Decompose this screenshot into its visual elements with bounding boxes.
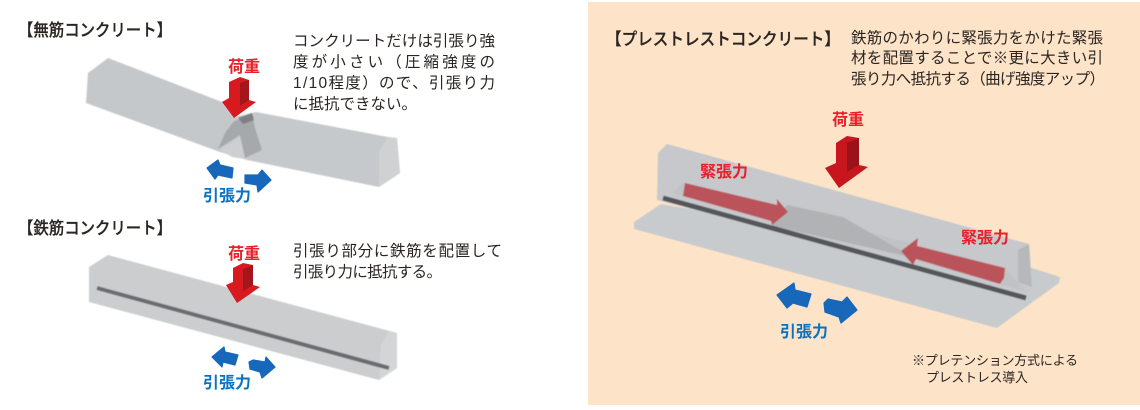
channel shadow: [673, 183, 1025, 291]
label: tension: 引張力: [203, 374, 251, 392]
text block: plain concrete explanation: に抵抗できない。: [293, 95, 417, 113]
arrow: tension right: [249, 357, 275, 378]
note: pretension method: [912, 353, 1078, 385]
arrow: tension right: [245, 170, 271, 192]
label: prestress left: 緊張力: [700, 163, 748, 181]
arrow: tension left: [212, 347, 238, 367]
text block: prestressed explanation: 張り力へ抵抗する（曲げ強度アップ）: [851, 70, 1105, 88]
text block: plain concrete explanation: 度が小さい（圧縮強度の: [293, 53, 495, 71]
panel: prestressed background: [588, 2, 1140, 405]
arrow: load: [226, 263, 260, 303]
arrow: prestress right: [901, 238, 1005, 284]
text block: prestressed explanation: 材を配置することで※更に大きい引: [851, 49, 1103, 67]
note: pretension method: ※プレテンション方式による: [912, 353, 1078, 368]
arrow: load: [222, 77, 256, 118]
heading: reinforced concrete: 【鉄筋コンクリート】: [18, 219, 172, 238]
flange: [634, 204, 1060, 328]
label: tension: 引張力: [780, 323, 828, 341]
center dark region: [772, 205, 916, 258]
heading: plain concrete: 【無筋コンクリート】: [18, 21, 172, 40]
heading: prestressed concrete: 【プレストレストコンクリート】: [606, 30, 840, 49]
text block: prestressed explanation: 鉄筋のかわりに緊張力をかけた緊張: [851, 29, 1103, 47]
text block: plain concrete explanation: コンクリートだけは引張り強: [293, 32, 495, 50]
arrow: tension right: [824, 297, 857, 323]
text block: plain concrete explanation: 1/10程度）ので、引張り力: [293, 74, 495, 92]
diagram: prestressed T beam: [634, 144, 1060, 328]
arrow: tension left: [207, 160, 233, 179]
arrow: load: [825, 136, 868, 188]
arrow: tension left: [777, 283, 811, 308]
label: load: 荷重: [832, 111, 864, 129]
label: prestress right: 緊張力: [961, 229, 1009, 247]
web: [657, 144, 1032, 296]
rebar: [97, 288, 389, 368]
section: plain concrete: [18, 21, 495, 205]
rebar: [663, 198, 1026, 298]
text block: plain concrete explanation: [293, 32, 495, 113]
text block: reinforced concrete explanation: 引張り力に抵抗する。: [293, 263, 442, 281]
label: tension: 引張力: [203, 187, 251, 205]
web end: [1018, 244, 1032, 287]
note: pretension method: プレストレス導入: [926, 370, 1028, 385]
arrow: prestress left: [683, 183, 788, 225]
label: load: 荷重: [228, 245, 260, 263]
text block: reinforced concrete explanation: [293, 242, 502, 281]
diagram: reinforced beam: [89, 255, 397, 380]
diagram: cracked beam: [86, 58, 400, 187]
text block: prestressed explanation: [851, 29, 1105, 88]
section: prestressed concrete: [606, 29, 1105, 385]
section: reinforced concrete: [18, 219, 502, 392]
label: load: 荷重: [228, 58, 260, 76]
text block: reinforced concrete explanation: 引張り部分に鉄筋を配置して: [293, 242, 502, 260]
